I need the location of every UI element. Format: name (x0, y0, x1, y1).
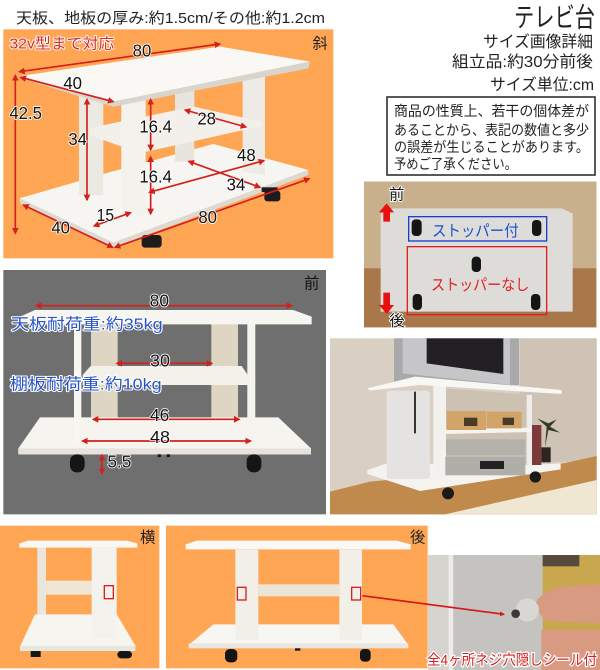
screw marker (104, 586, 113, 599)
bottom board (19, 144, 308, 247)
no-stopper box: ストッパーなし (431, 277, 529, 294)
label: side: 横 (140, 529, 155, 546)
dimension numbers: 42.5 (9, 103, 42, 123)
casters (70, 454, 261, 472)
storage boxes (447, 411, 522, 430)
dimension numbers: 15 (97, 205, 114, 225)
arrow: front (379, 203, 394, 222)
dimension arrows (15, 44, 309, 247)
dimension numbers: 30 (150, 350, 170, 370)
label: front: 前 (304, 275, 319, 292)
game console (387, 391, 430, 479)
dimension numbers: 40 (51, 218, 70, 238)
AV decks (445, 439, 525, 475)
casters (225, 648, 371, 662)
dimension numbers: 28 (197, 108, 216, 128)
TV (394, 338, 519, 385)
title block (452, 3, 595, 94)
no-stopper box (407, 247, 547, 315)
legs and shelf (79, 75, 265, 216)
note box: の誤差が生じることがあります。 (394, 139, 589, 155)
panel: back view (166, 526, 428, 668)
panel: diagonal view (3, 29, 333, 258)
label: diagonal: 斜 (313, 35, 328, 52)
dimension numbers: 46 (150, 405, 169, 425)
note box: 商品の性質上、若干の個体差が (394, 103, 589, 119)
label: back: 後 (389, 313, 405, 330)
dimension arrows (36, 306, 292, 474)
casters (31, 651, 132, 658)
photo: room scene (330, 338, 597, 514)
arrow: to sticker (362, 596, 504, 614)
title block: サイズ単位:cm (490, 76, 594, 94)
dimension numbers: 5.5 (107, 452, 131, 472)
dimension numbers: 40 (63, 73, 82, 93)
plant (532, 418, 560, 465)
note box (387, 97, 595, 175)
load label: top: 天板耐荷重:約35kg (11, 316, 163, 334)
dimension numbers: 80 (150, 291, 169, 311)
sticker (516, 598, 539, 622)
dimension numbers: 80 (198, 207, 217, 227)
note box: あることから、表記の数値と多少 (394, 122, 589, 138)
dimension numbers: 48 (150, 427, 170, 447)
dimension numbers: 16.4 (139, 116, 172, 136)
screw markers (237, 587, 361, 600)
screw hole (511, 609, 520, 618)
dimension numbers: 34 (227, 174, 245, 194)
wheels (412, 219, 541, 310)
TV stand (367, 377, 562, 491)
note box: 予めご了承ください。 (394, 156, 517, 172)
stand drawing (18, 310, 312, 454)
panel: front view (3, 270, 326, 514)
label: 32v: 32v型まで対応 (9, 35, 114, 52)
label: front: 前 (389, 186, 404, 203)
heading: board thickness: 天板、地板の厚み:約1.5cm/その他:約1.2cm (16, 10, 325, 27)
photo: underside view (364, 182, 596, 330)
dimension numbers: 16.4 (139, 166, 172, 186)
casters (142, 187, 280, 248)
load label: shelf: 棚板耐荷重:約10kg (10, 375, 162, 393)
tabletop (20, 47, 310, 107)
dimension numbers: 34 (68, 129, 87, 149)
label: back: 後 (410, 529, 425, 546)
dimension numbers (9, 41, 256, 238)
stopper box: ストッパー付 (432, 223, 519, 240)
photo: sticker closeup (428, 555, 600, 670)
dimension numbers (107, 291, 170, 472)
stopper box (409, 217, 547, 241)
arrow: back (379, 293, 394, 314)
casters (442, 471, 541, 499)
dimension numbers: 48 (237, 145, 256, 165)
title block: サイズ画像詳細 (483, 33, 593, 51)
dimension numbers: 80 (133, 41, 151, 61)
panel: side view (0, 526, 159, 668)
title block: 組立品:約30分前後 (452, 53, 593, 71)
fingers holding sticker (536, 584, 600, 670)
